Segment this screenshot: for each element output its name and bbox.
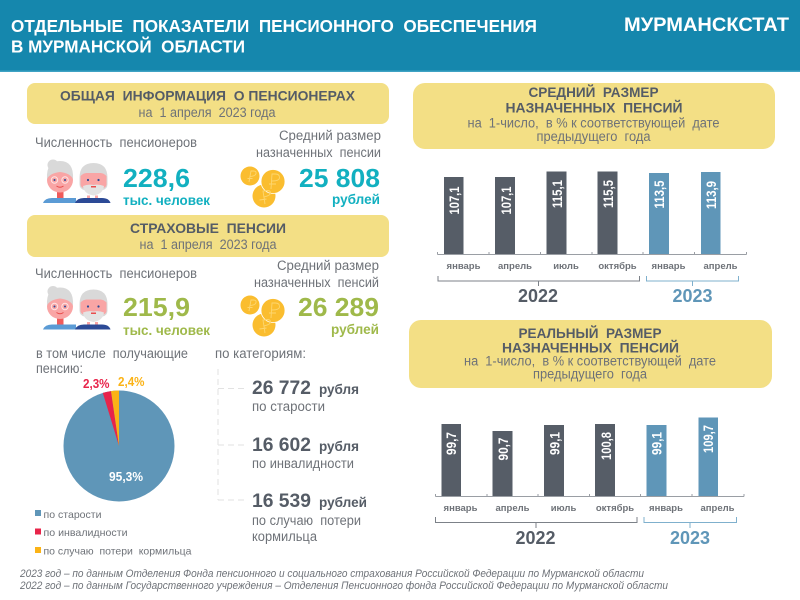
bar chart: average pension: январь <box>652 261 686 272</box>
panel: average pension heading <box>413 83 775 149</box>
panel: insurance pensions heading <box>27 215 389 257</box>
bar chart: average pension: 113,5 <box>651 180 667 208</box>
category: old age: рубля <box>319 382 359 397</box>
panel: real pension heading <box>409 320 772 388</box>
category: survivor: рублей <box>319 495 367 510</box>
text: by categories: по категориям: <box>215 346 306 361</box>
panel: insurance pensions heading: СТРАХОВЫЕ ПЕНСИИ <box>130 220 286 236</box>
bar chart: average pension: 2022 <box>518 286 558 306</box>
panel: real pension heading: предыдущего года <box>533 366 647 382</box>
label: average insurance pension: Средний размер <box>277 258 379 273</box>
pie legend: по инвалидности <box>44 527 128 539</box>
label: number of insurance pensioners: Численность пенсионеров <box>35 266 197 281</box>
category: disability: рубля <box>319 439 359 454</box>
bar chart: real pension: 99,1 <box>648 432 664 455</box>
icon: pensioners couple <box>43 286 110 330</box>
stat: total pensioners <box>123 163 210 208</box>
category: disability: по инвалидности <box>252 456 354 471</box>
panel: average pension heading: предыдущего года <box>536 129 651 144</box>
bar chart: real pension: январь <box>649 503 683 514</box>
category: disability: 16 602 <box>252 434 311 456</box>
bar chart: real pension: 109,7 <box>700 425 716 453</box>
bar chart: average pension: январь <box>447 261 481 272</box>
bar chart: average pension: 107,1 <box>498 186 514 214</box>
bar chart: real pension <box>436 418 744 548</box>
panel: real pension heading: НАЗНАЧЕННЫХ ПЕНСИЙ <box>502 338 679 356</box>
bar chart: average pension <box>438 172 746 306</box>
panel: general information heading <box>27 83 389 124</box>
category: old age: 26 772 <box>252 377 311 399</box>
pie chart: 95,3% <box>109 469 143 484</box>
icon: coins <box>240 166 285 208</box>
panel: insurance pensions heading: на 1 апреля 2023 года <box>140 237 277 252</box>
category: survivor <box>252 490 367 544</box>
pie chart: 2,4% <box>118 374 145 389</box>
category: survivor: по случаю потери <box>252 513 361 528</box>
bar chart: real pension: 99,1 <box>546 432 562 455</box>
text: including recipients: в том числе получающие <box>36 346 188 361</box>
stat: average insurance pension: рублей <box>331 322 379 337</box>
label: average pension size: назначенных пенсии <box>256 145 381 160</box>
label: average pension size <box>256 128 381 160</box>
stat: average pension: 25 808 <box>299 163 380 193</box>
title: ОТДЕЛЬНЫЕ ПОКАЗАТЕЛИ ПЕНСИОННОГО ОБЕСПЕЧЕНИЯ <box>11 16 537 36</box>
bar chart: average pension: 115,1 <box>549 180 565 208</box>
header band <box>0 0 800 72</box>
icon: pensioners couple <box>43 160 110 203</box>
label: average insurance pension <box>254 258 379 290</box>
icon: coins <box>240 296 285 336</box>
stat: insurance pensioners <box>123 292 210 338</box>
footnotes <box>19 568 668 592</box>
panel: general information heading: ОБЩАЯ ИНФОРМАЦИЯ О ПЕНСИОНЕРАХ <box>60 88 356 104</box>
pie legend: по случаю потери кормильца <box>44 546 192 558</box>
footnotes: 2022 год – по данным Государственного учреждения – Отделения Пенсионного фонда Российской Федерации по Мурманской области <box>19 580 668 592</box>
title <box>11 16 537 56</box>
bar chart: real pension: 2022 <box>516 528 556 548</box>
panel: real pension heading: на 1-число, в % к соответствующей дате <box>464 354 716 368</box>
organisation name: МУРМАНСКСТАТ <box>624 14 789 36</box>
pie chart <box>64 374 174 502</box>
pie legend: по старости <box>44 509 102 521</box>
stat: average pension <box>299 163 380 207</box>
pie chart: 2,3% <box>83 376 110 391</box>
text: including recipients <box>36 346 188 376</box>
bar chart: real pension: 2023 <box>670 528 710 548</box>
panel: real pension heading: РЕАЛЬНЫЙ РАЗМЕР <box>518 324 662 341</box>
category connector <box>218 369 245 500</box>
text: including recipients: пенсию: <box>36 361 83 376</box>
bar chart: real pension: 99,7 <box>443 432 459 455</box>
bar chart: real pension: июль <box>551 503 576 514</box>
pie legend <box>35 509 192 558</box>
bar chart: real pension: апрель <box>496 503 530 514</box>
bar chart: real pension: январь <box>444 503 478 514</box>
stat: average insurance pension <box>298 292 379 337</box>
stat: average pension: рублей <box>332 192 380 207</box>
bar chart: average pension: 115,5 <box>600 180 616 208</box>
bar chart: real pension: апрель <box>701 503 735 514</box>
label: average insurance pension: назначенных пенсий <box>254 275 379 290</box>
bar chart: average pension: 113,9 <box>703 181 719 209</box>
bar chart: average pension: апрель <box>498 261 532 272</box>
category: survivor: 16 539 <box>252 490 311 512</box>
category: old age <box>252 377 359 414</box>
panel: average pension heading: СРЕДНИЙ РАЗМЕР <box>528 83 658 100</box>
bar chart: average pension: октябрь <box>598 261 637 272</box>
footnotes: 2023 год – по данным Отделения Фонда пенсионного и социального страхования Российской Федерации по Мурманской области <box>19 568 644 580</box>
panel: general information heading: на 1 апреля 2023 года <box>138 105 276 120</box>
bar chart: average pension: апрель <box>704 261 738 272</box>
stat: total pensioners: 228,6 <box>123 163 190 193</box>
stat: average insurance pension: 26 289 <box>298 292 379 322</box>
bar chart: average pension: 2023 <box>672 286 712 306</box>
title: В МУРМАНСКОЙ ОБЛАСТИ <box>11 36 245 56</box>
bar chart: average pension: 107,1 <box>446 186 462 214</box>
category: disability <box>252 434 359 471</box>
bar chart: real pension: октябрь <box>596 503 634 514</box>
label: number of pensioners: Численность пенсионеров <box>35 135 197 150</box>
panel: average pension heading: на 1-число, в % к соответствующей дате <box>468 116 720 130</box>
category: old age: по старости <box>252 399 325 414</box>
bar chart: real pension: 90,7 <box>495 437 511 460</box>
category: survivor: кормильца <box>252 529 317 544</box>
bar chart: real pension: 100,8 <box>598 432 614 460</box>
panel: average pension heading: НАЗНАЧЕННЫХ ПЕНСИЙ <box>506 98 682 116</box>
bar chart: average pension: июль <box>553 261 579 272</box>
stat: total pensioners: тыс. человек <box>123 193 210 208</box>
stat: insurance pensioners: тыс. человек <box>123 323 210 338</box>
label: average pension size: Средний размер <box>279 128 381 143</box>
stat: insurance pensioners: 215,9 <box>123 292 190 322</box>
